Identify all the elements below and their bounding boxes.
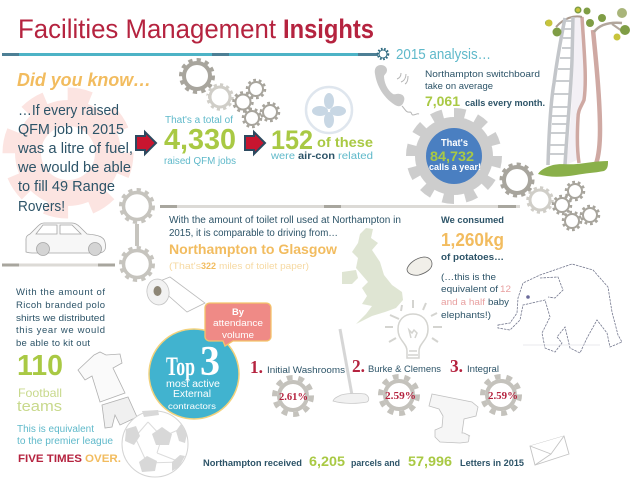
callout: top 3 circle: 3	[200, 339, 220, 385]
text: polo shirts: be able to kit out	[16, 338, 90, 349]
text: parcels and letters: Northampton received	[203, 458, 302, 469]
text: did you know body	[17, 102, 133, 215]
illustration: ladder and trees	[538, 6, 630, 177]
text: potatoes: (…this is the	[441, 272, 496, 283]
callout: top 3 circle: most active	[166, 379, 220, 390]
callout: by attendance volume: attendance	[213, 318, 263, 328]
text: switchboard: Northampton switchboard	[425, 69, 540, 80]
text: premier league: OVER.	[85, 453, 121, 465]
stat: 152 air-con: were	[270, 151, 295, 162]
stat: 4,330 raised QFM jobs: 4,330	[164, 124, 236, 156]
text: did you know body: was a litre of fuel,	[17, 140, 133, 157]
stat: 4,330 raised QFM jobs: That's a total of	[165, 115, 233, 126]
text: switchboard: 7,061	[425, 93, 460, 109]
gear: 84,732 calls a year	[412, 114, 496, 198]
text: premier league: This is equivalent	[17, 424, 94, 435]
stat: 152 air-con: air-con	[298, 151, 335, 162]
heading: did you know: Did you know…	[17, 70, 151, 90]
text: premier league: FIVE TIMES	[18, 453, 82, 465]
text: switchboard	[425, 69, 545, 109]
text: parcels and letters: 6,205	[309, 453, 345, 469]
text: switchboard: calls every month.	[465, 98, 545, 109]
text: did you know body: …If every raised	[18, 102, 119, 119]
contractor 3: 2.59%	[488, 391, 518, 402]
text: did you know body: we would be able	[17, 159, 131, 176]
text: potatoes	[441, 215, 511, 321]
text: parcels and letters: 57,996	[408, 453, 452, 469]
text: polo shirts: With the amount of	[16, 287, 105, 298]
stat: 152 air-con: 152	[271, 125, 313, 155]
contractor 2	[352, 356, 442, 414]
title: Insights	[283, 14, 374, 44]
icon: toilet roll	[145, 277, 205, 312]
map: United Kingdom	[342, 228, 403, 324]
text: polo shirts	[16, 287, 105, 349]
title: Facilities Management	[18, 14, 276, 44]
text: toilet roll: miles of toilet paper)	[219, 261, 309, 272]
text: toilet roll: Northampton to Glasgow	[169, 241, 337, 257]
gears: right cluster	[502, 164, 599, 230]
stat: 110 football teams: Football	[18, 386, 62, 400]
contractor 1: Initial Washrooms	[267, 365, 346, 375]
icon: football	[122, 410, 188, 477]
contractor 1: 2.61%	[279, 392, 308, 403]
stat: 152 air-con: related	[338, 151, 373, 162]
text: potatoes: of potatoes…	[441, 252, 504, 263]
gear: 84,732 calls a year: calls a year!	[429, 162, 481, 173]
icon: light bulb	[385, 300, 442, 358]
contractor 2: 2.	[352, 356, 365, 376]
contractor 1: 1.	[250, 357, 263, 377]
text: polo shirts: Ricoh branded polo	[16, 300, 105, 311]
icon: envelope	[530, 436, 569, 465]
callout: top 3 circle: contractors	[168, 401, 216, 411]
icon: potato	[407, 257, 432, 275]
text: toilet roll: 2015, it is comparable to driving from…	[169, 228, 338, 239]
contractor 3	[450, 356, 520, 414]
stat: 152 air-con	[270, 125, 373, 162]
callout: by attendance volume: By	[232, 307, 244, 317]
contractor 1	[250, 357, 346, 414]
stat: 4,330 raised QFM jobs	[164, 115, 236, 167]
heading: 2015 analysis: 2015 analysis…	[396, 46, 491, 63]
text: potatoes: 12	[500, 284, 511, 295]
icon: telephone	[375, 65, 419, 115]
text: toilet roll: 322	[201, 261, 216, 272]
icon: drill	[429, 394, 478, 443]
text: potatoes: elephants!)	[441, 310, 491, 321]
illustration: elephant	[498, 264, 622, 353]
illustration: Range Rover	[26, 223, 106, 256]
text: potatoes: and a half	[441, 297, 485, 308]
text: polo shirts: shirts we distributed	[16, 313, 105, 324]
arrow: to air-con	[245, 132, 265, 154]
callout: top 3 circle: Top	[166, 352, 195, 381]
header timeline	[2, 49, 388, 59]
text: parcels and letters	[203, 453, 525, 469]
text: potatoes: equivalent of	[441, 284, 498, 295]
text: toilet roll: With the amount of toilet roll used at Northampton in	[169, 215, 401, 226]
contractor 2: 2.59%	[385, 391, 416, 402]
callout: by attendance volume: volume	[222, 330, 254, 340]
text: premier league	[17, 424, 121, 465]
stat: 4,330 raised QFM jobs: raised QFM jobs	[164, 156, 236, 167]
text: did you know body: Rovers!	[18, 198, 65, 215]
gear: 84,732 calls a year: That's	[441, 138, 468, 149]
callout: top 3 circle	[149, 329, 239, 419]
contractor 3: 3.	[450, 356, 463, 376]
text: toilet roll	[169, 215, 401, 272]
middle timeline with gears	[2, 190, 520, 280]
text: did you know body: QFM job in 2015	[18, 121, 124, 138]
background gear: pink	[9, 94, 127, 212]
arrow: to total	[136, 132, 156, 154]
icon: fan	[306, 87, 352, 133]
text: potatoes: baby	[488, 297, 509, 308]
text: did you know body: to fill 49 Range	[18, 178, 115, 195]
contractor 2: Burke & Clemens	[368, 364, 442, 374]
stat: 110 football teams	[17, 350, 63, 415]
contractor 3: Integral	[467, 364, 499, 374]
stat: 110 football teams: teams	[17, 398, 62, 415]
text: potatoes: We consumed	[441, 215, 504, 226]
text: parcels and letters: parcels and	[351, 458, 400, 469]
icon: mop	[333, 329, 369, 403]
text: parcels and letters: Letters in 2015	[460, 458, 525, 469]
text: potatoes: 1,260kg	[441, 230, 504, 250]
text: toilet roll: (That's	[169, 261, 201, 272]
gear: 84,732 calls a year: 84,732	[430, 148, 474, 164]
gears: top cluster	[181, 60, 279, 127]
callout: top 3 circle: External	[173, 389, 211, 400]
text: switchboard: take on average	[425, 81, 493, 92]
text: premier league: to the premier league	[17, 436, 113, 447]
icon: football kit	[78, 352, 137, 428]
callout: by attendance volume	[205, 303, 271, 346]
stat: 152 air-con: of these	[317, 134, 373, 150]
stat: 110 football teams: 110	[17, 350, 63, 382]
text: polo shirts: this year we would	[16, 325, 105, 336]
